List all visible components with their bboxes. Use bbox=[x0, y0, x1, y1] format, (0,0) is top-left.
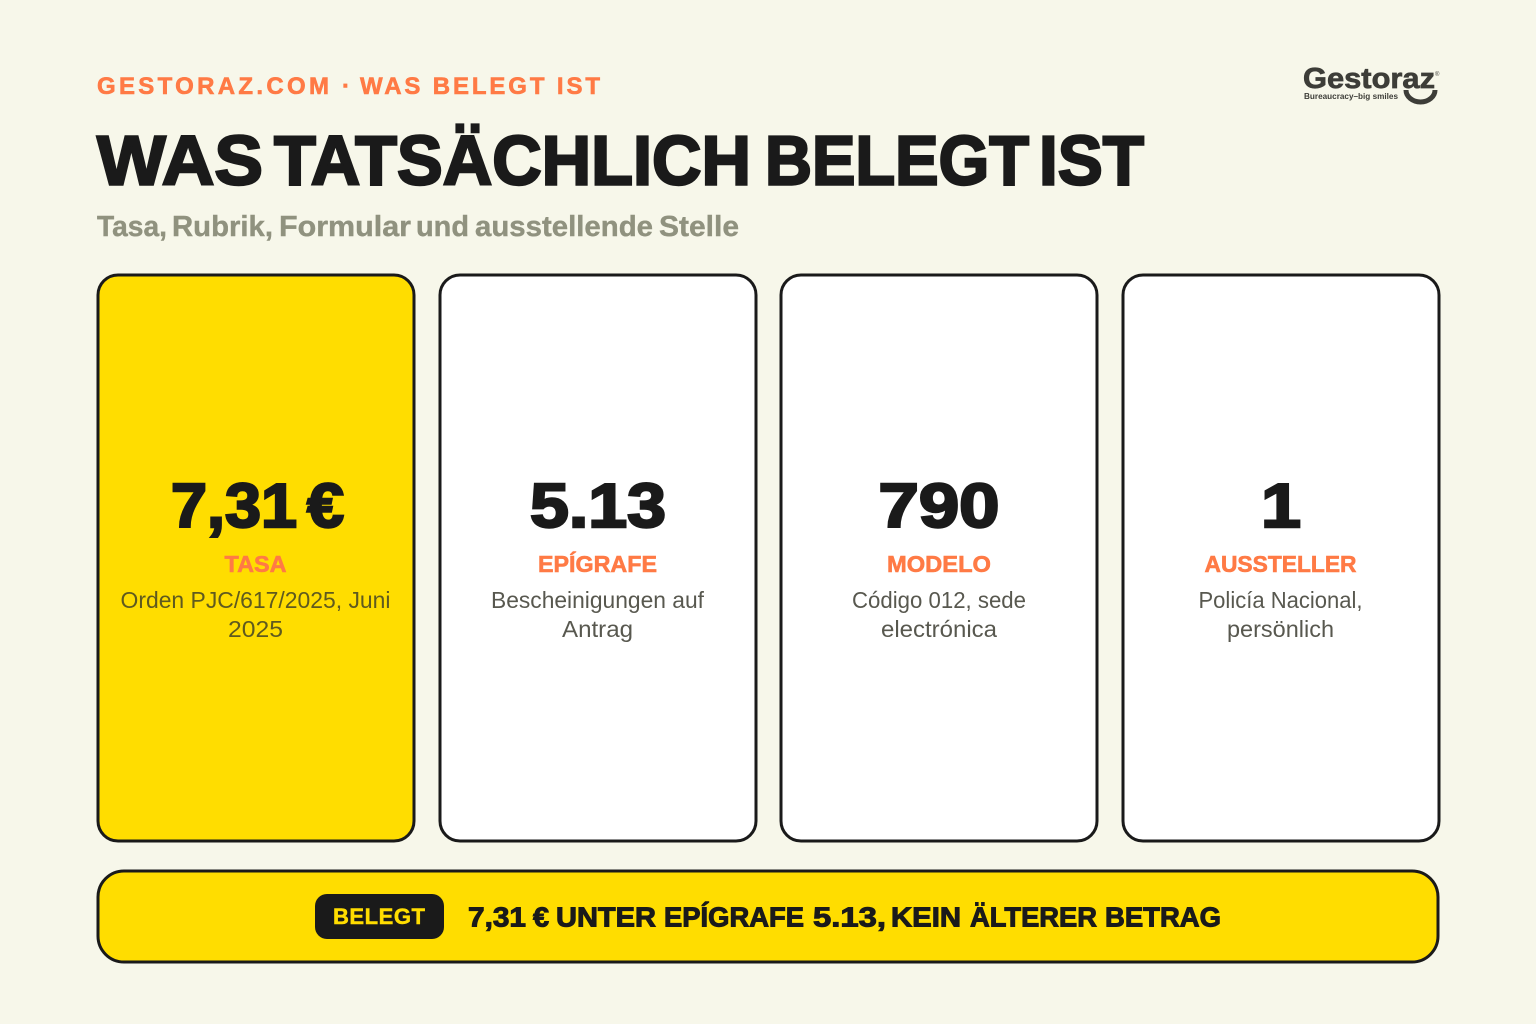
panel: Modelo: MODELO bbox=[887, 551, 991, 577]
title: BELEGT bbox=[765, 122, 1029, 200]
banner text: UNTER bbox=[556, 902, 656, 932]
subtitle: Tasa, bbox=[97, 211, 167, 243]
subtitle: ausstellende bbox=[475, 211, 653, 243]
title: TATSÄCHLICH bbox=[274, 122, 751, 200]
badge: Belegt bbox=[315, 894, 444, 939]
panel: Tasa: TASA bbox=[224, 551, 286, 577]
subtitle bbox=[97, 211, 739, 243]
banner text bbox=[468, 902, 1221, 932]
panel: Modelo bbox=[781, 275, 1097, 841]
banner: verified conclusion bbox=[98, 871, 1438, 962]
banner text: ÄLTERER bbox=[970, 902, 1097, 932]
panel: Modelo: electrónica bbox=[881, 616, 997, 642]
banner text: 7,31 bbox=[468, 902, 526, 932]
eyebrow heading: WAS BELEGT IST bbox=[360, 73, 600, 100]
panel: Aussteller: 1 bbox=[1261, 472, 1301, 541]
logo: Gestoraz: Gestoraz bbox=[1303, 63, 1435, 95]
panel: Modelo: 790 bbox=[878, 472, 1000, 541]
panel: Aussteller bbox=[1123, 275, 1439, 841]
banner text: € bbox=[533, 902, 549, 932]
panel: Epígrafe: 5.13 bbox=[530, 472, 666, 541]
subtitle: Formular bbox=[279, 211, 411, 243]
panel: Tasa: € bbox=[307, 472, 344, 541]
eyebrow heading: GESTORAZ.COM bbox=[97, 73, 329, 100]
panel: Modelo: Código 012, sede bbox=[852, 587, 1026, 613]
panel: Aussteller: Policía Nacional, bbox=[1198, 587, 1362, 613]
panel: Tasa: Orden PJC/617/2025, Juni bbox=[120, 587, 390, 613]
panel: Epígrafe bbox=[440, 275, 756, 841]
panel: Epígrafe: EPÍGRAFE bbox=[538, 550, 657, 577]
banner text: KEIN bbox=[891, 902, 961, 932]
eyebrow heading: · bbox=[342, 73, 350, 100]
subtitle: Rubrik, bbox=[172, 211, 273, 243]
panel: Aussteller: persönlich bbox=[1227, 616, 1334, 642]
panel: Tasa: 2025 bbox=[228, 616, 283, 642]
subtitle: und bbox=[416, 211, 469, 243]
panel: Tasa bbox=[98, 275, 414, 841]
panel: Tasa: 7,31 bbox=[171, 472, 297, 541]
panel: Epígrafe: Bescheinigungen auf bbox=[491, 587, 705, 613]
title: WAS bbox=[97, 122, 263, 200]
badge: Belegt: BELEGT bbox=[333, 904, 426, 929]
logo: Gestoraz: ® bbox=[1435, 71, 1440, 78]
banner text: 5.13, bbox=[813, 902, 886, 932]
panel: Aussteller: AUSSTELLER bbox=[1204, 551, 1357, 577]
subtitle: Stelle bbox=[659, 211, 739, 243]
banner text: BETRAG bbox=[1105, 902, 1221, 932]
panel: Epígrafe: Antrag bbox=[562, 616, 633, 642]
eyebrow heading bbox=[97, 73, 600, 100]
title: IST bbox=[1039, 122, 1144, 200]
title bbox=[97, 122, 1144, 200]
banner text: EPÍGRAFE bbox=[664, 902, 804, 932]
logo: Gestoraz: Bureaucracy–big smiles bbox=[1304, 92, 1399, 101]
